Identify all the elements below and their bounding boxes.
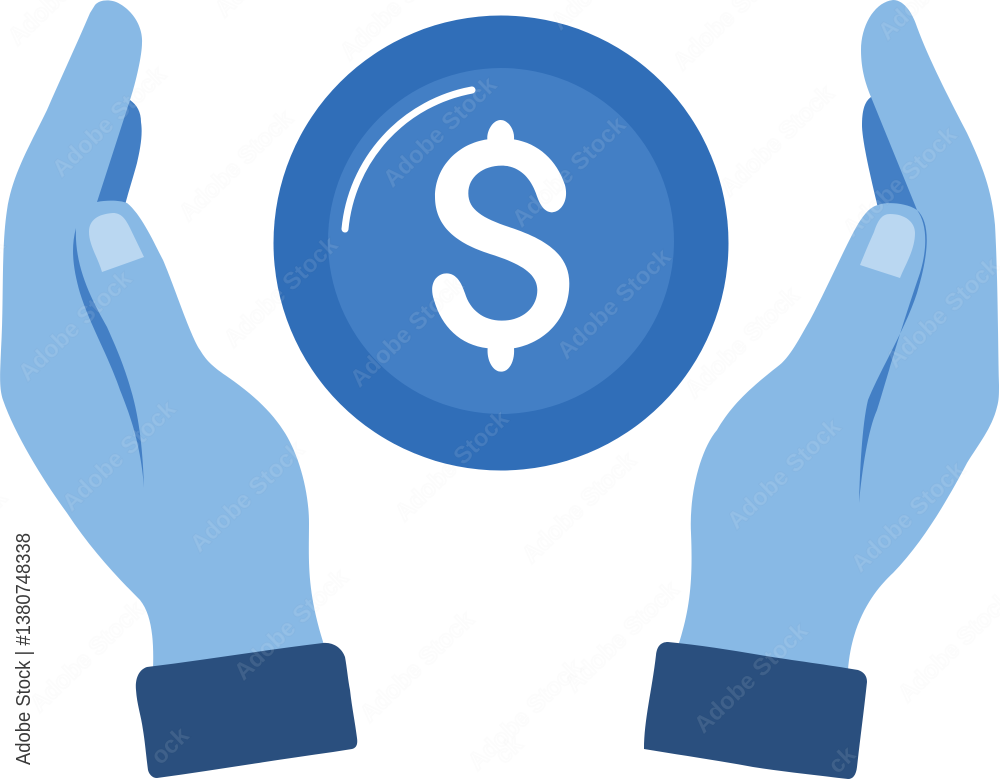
stock image ID text: Adobe Stock | #1380748338 (13, 533, 35, 765)
watermark pattern: Adobe Stock (229, 564, 354, 686)
watermark pattern: Adobe Stock (517, 447, 642, 569)
watermark pattern: Adobe Stock (390, 405, 515, 527)
coin highlight arc (345, 90, 472, 229)
watermark pattern: Adobe Stock (722, 413, 847, 535)
watermark pattern: Adobe Stock (560, 576, 685, 698)
illustration: left hand (0, 0, 357, 778)
watermark pattern: Adobe Stock (57, 395, 182, 517)
coin inner face (328, 68, 674, 414)
watermark pattern: Adobe Stock (355, 606, 480, 728)
icon: left hand shape (0, 0, 325, 670)
watermark pattern: ck (823, 741, 861, 779)
illustration: dollar coin (274, 16, 728, 470)
watermark pattern: ock (146, 721, 195, 770)
watermark pattern: Adobe Stock (715, 80, 840, 202)
icon: dollar sign (432, 120, 569, 372)
watermark pattern: Adobe Stock (47, 61, 172, 183)
icon: right hand shape (678, 0, 999, 670)
watermark pattern: Adobe Stock (185, 436, 310, 558)
watermark pattern: Adobe Stock (463, 654, 588, 776)
watermark pattern: Adobe Stock (507, 111, 632, 233)
watermark pattern: Adobe Stock (680, 282, 805, 404)
watermark pattern: Adobe Stock (219, 231, 344, 353)
watermark pattern: Adobe Stock (345, 271, 470, 393)
watermark pattern: Adobe Stock (846, 456, 971, 578)
coin outer ring (274, 16, 728, 470)
watermark pattern: Adobe Stock (13, 265, 138, 387)
watermark pattern: Adobe Stock (174, 105, 299, 227)
icon: dark finger behind right hand (862, 90, 930, 215)
icon: right thumb crease (859, 210, 927, 503)
icon: right cuff (644, 642, 867, 779)
icon: right thumbnail (860, 214, 915, 278)
icon: left thumbnail (89, 213, 144, 272)
icon: dark finger behind left hand (90, 100, 142, 205)
watermark pattern: Adobe Stock (838, 121, 963, 243)
illustration: right hand (644, 0, 999, 779)
watermark pattern: Adobe Stock (25, 596, 150, 718)
watermark pattern: Adobe Stock (552, 243, 677, 365)
watermark pattern: Adobe Stock (378, 71, 503, 193)
icon: left cuff (136, 643, 357, 778)
icon: left thumb crease (73, 228, 144, 488)
watermark pattern: ck (490, 731, 528, 769)
watermark pattern: Adobe Stock (689, 617, 814, 739)
